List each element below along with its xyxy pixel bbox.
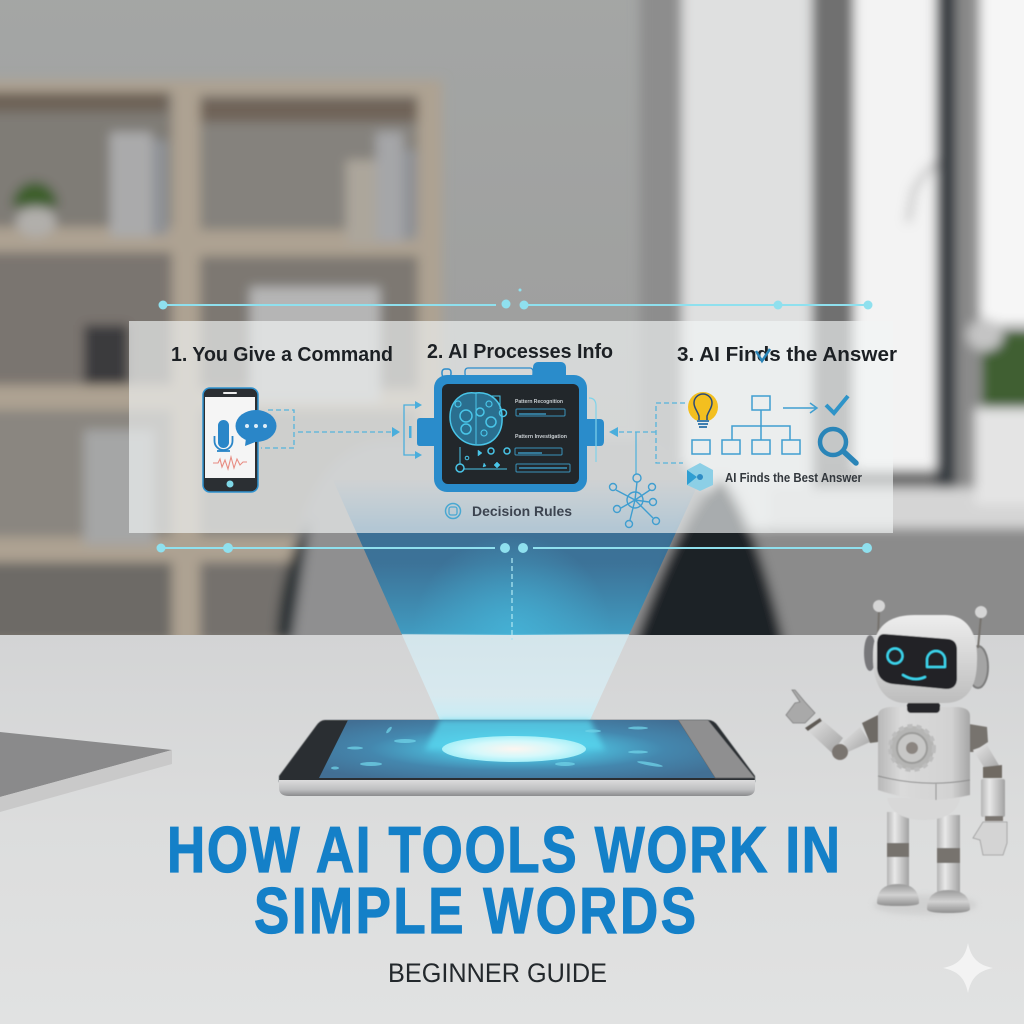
subtitle: BEGINNER GUIDE [388,958,607,988]
arrow: phone to processor [261,410,400,448]
title [167,815,840,947]
laptop corner [0,732,172,812]
robot ears [864,635,876,671]
screen bars [515,409,570,472]
top timeline [158,288,872,310]
hologram light cone [333,480,700,720]
screen labels: Pattern Recognition [515,399,564,405]
robot head [873,615,977,703]
icon: AI processor device [417,362,604,492]
robot torso [878,707,970,799]
icon: light bulb [688,392,718,427]
robot neck [907,702,940,713]
title: SIMPLE WORDS [254,876,696,947]
bottom timeline [156,543,872,553]
screen sparkles [331,726,663,770]
connectors into processor [404,401,422,459]
icon: neural network [610,474,660,528]
robot legs [877,812,970,913]
icon: phone with microphone [203,388,276,492]
arrow: answer back to processor [609,403,685,474]
title: HOW AI TOOLS WORK IN [167,815,840,886]
robot antennae [873,600,987,648]
robot pelvis [887,798,960,820]
step 1 heading: 1. You Give a Command [171,343,393,366]
vertical dashed beam line [511,558,513,640]
robot visor face [877,634,957,689]
icon: cube [687,463,713,491]
icon: magnifying glass [820,429,856,463]
brain illustration [450,393,510,472]
step 3 caption: AI Finds the Best Answer [725,471,862,485]
sparkle mark [943,943,993,993]
robot mascot [786,600,1007,915]
step 2 heading: 2. AI Processes Info [427,340,613,363]
decision rules label: Decision Rules [472,503,572,519]
blurred office background [0,0,1024,660]
robot gear emblem [890,726,934,770]
icon: AI processor device: Pattern Investigation [515,434,568,440]
step 3 heading: 3. AI Finds the Answer [677,343,897,366]
flowchart [692,396,817,454]
robot right arm [963,723,1007,855]
connector bracket right of processor [589,398,596,462]
icon: check mark [826,396,848,413]
robot left arm pointing [786,690,878,760]
tablet projector [279,720,755,796]
glass panel [129,321,893,533]
desk surface [0,635,1024,1024]
